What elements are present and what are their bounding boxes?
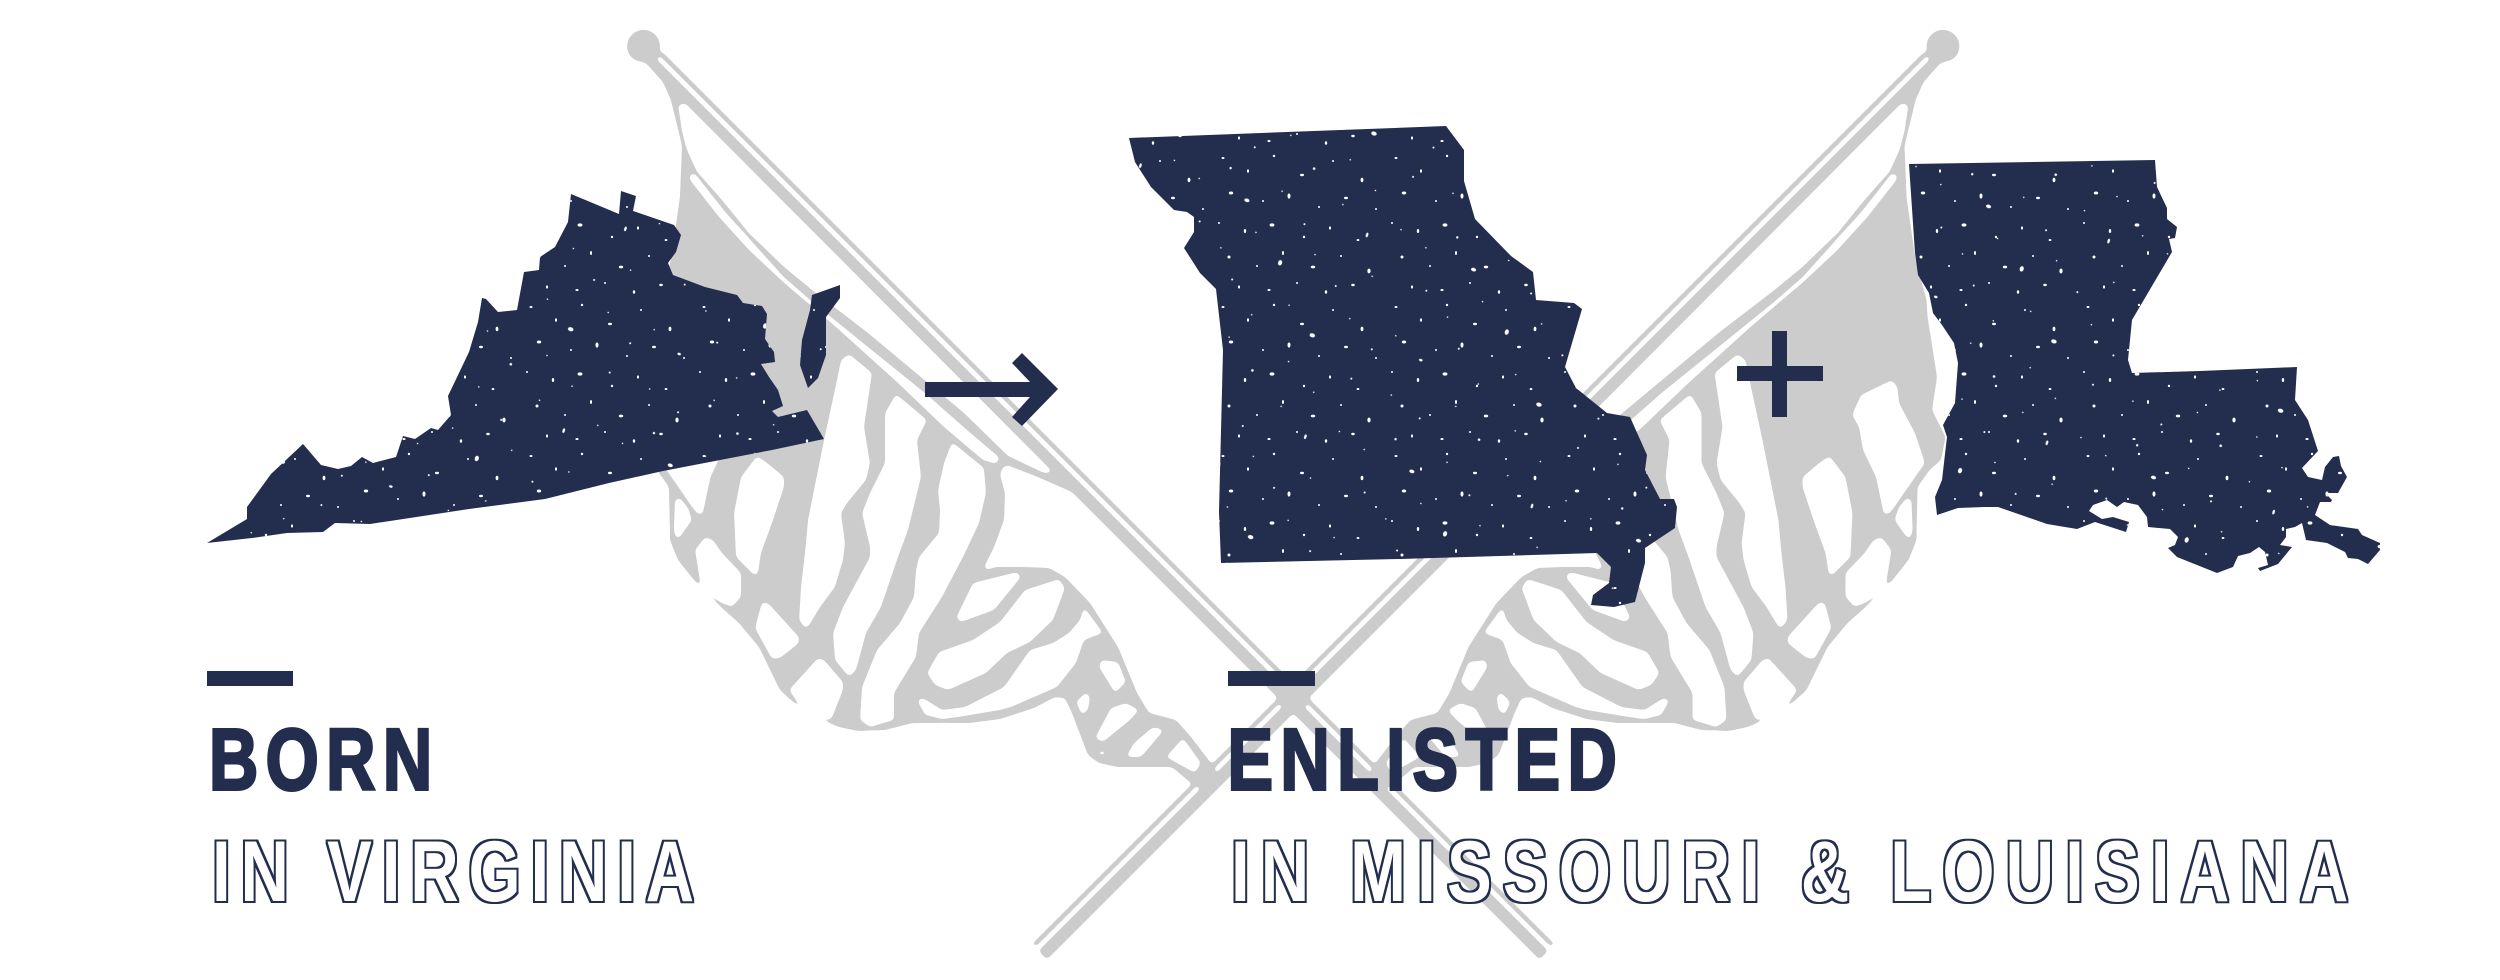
flag: right, mirrored [1030,30,1959,959]
arrow [925,353,1058,426]
subheading: In Virginia: IN VIRGINIA [212,824,704,920]
heading: Enlisted: ENLISTED [1228,711,1624,808]
state: Louisiana [1909,160,2380,573]
dash above Born [207,671,293,686]
state: Missouri [1129,126,1677,607]
state: Virginia [207,191,840,543]
crossed flags background [627,30,1959,959]
dash above Enlisted [1228,671,1315,686]
plus sign [1737,331,1823,417]
flag: left [627,30,1556,959]
heading: Born: BORN [209,711,440,808]
subheading: In Missouri and Louisiana: IN MISSOURI & LOUISIANA [1231,824,2359,920]
